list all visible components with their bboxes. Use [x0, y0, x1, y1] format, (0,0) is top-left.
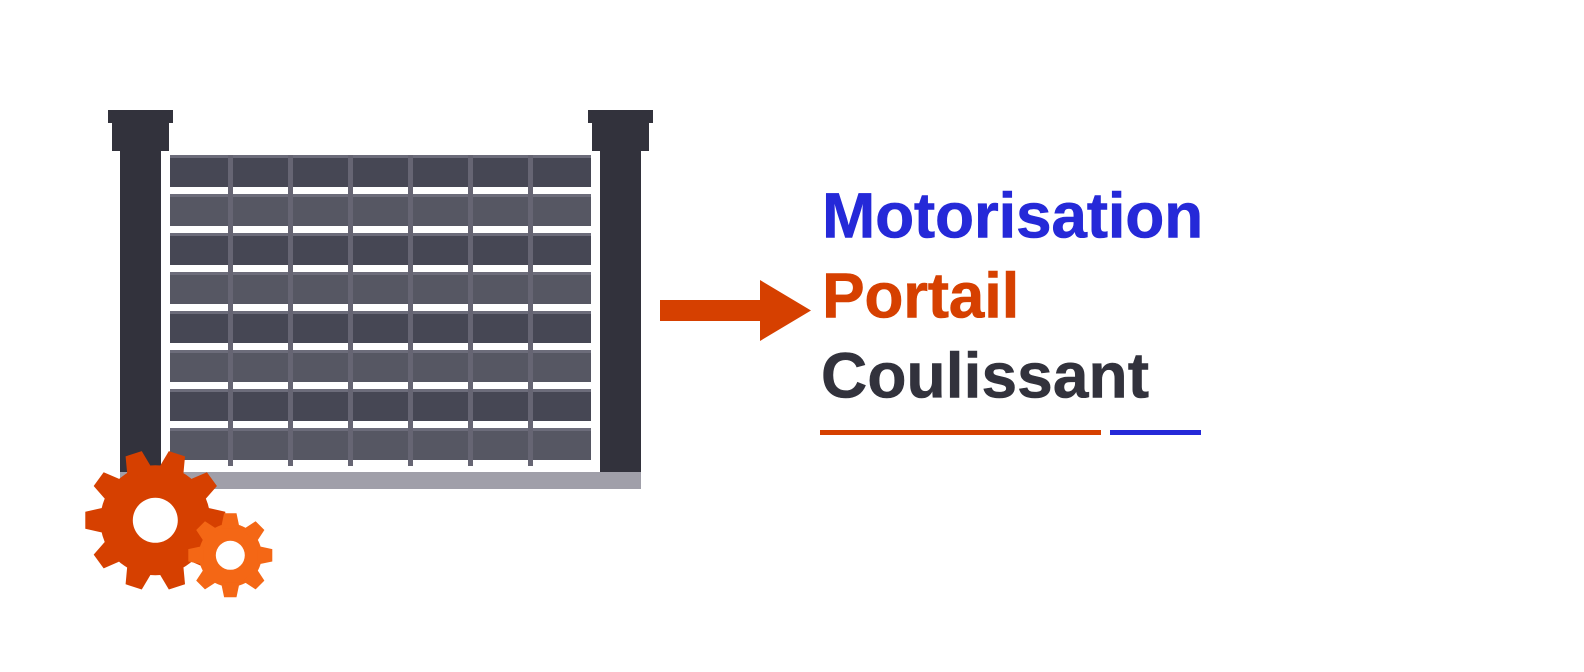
- base slab: [120, 472, 641, 489]
- title line: Coulissant: Coulissant: [821, 340, 1149, 412]
- right post: [588, 110, 653, 472]
- gate illustration: [108, 110, 653, 489]
- title line: Portail: Portail: [822, 260, 1019, 332]
- left post: [108, 110, 173, 472]
- title line: Motorisation: Motorisation: [822, 180, 1203, 252]
- arrow: [660, 280, 811, 341]
- icon: large gear: [85, 450, 225, 591]
- underline accent: [820, 430, 1201, 435]
- gate panel bars: [170, 155, 591, 466]
- title: [821, 180, 1203, 412]
- icon: small gear: [188, 513, 272, 597]
